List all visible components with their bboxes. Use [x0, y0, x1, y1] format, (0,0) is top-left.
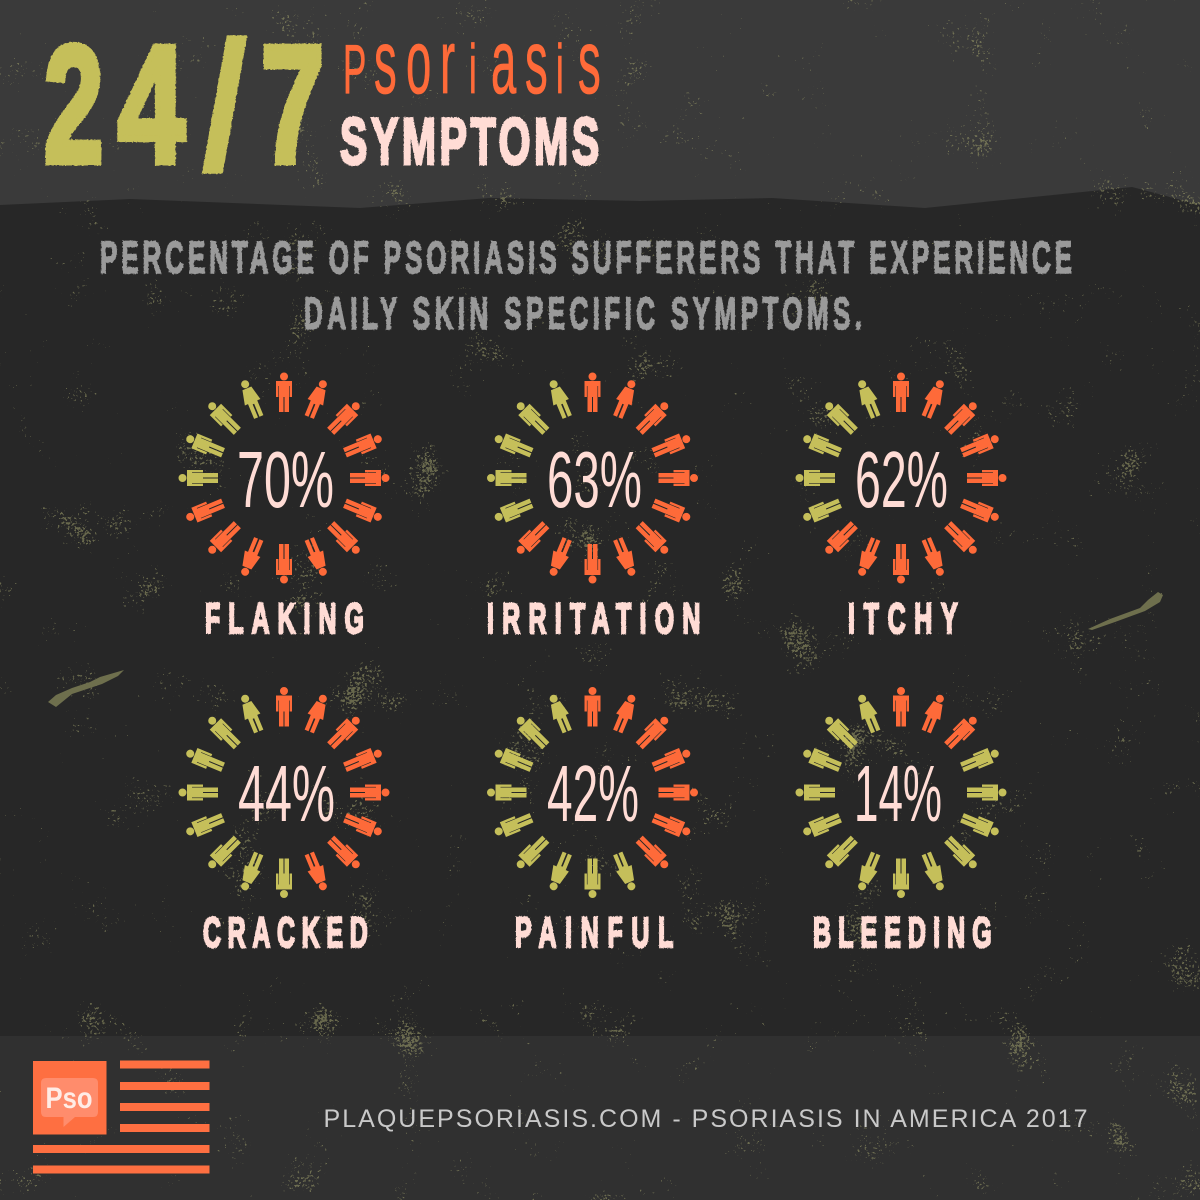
- title: 24/7: 7: [261, 12, 324, 198]
- label: CRACKED: [203, 909, 368, 957]
- label: BLEEDING: [813, 909, 992, 957]
- label: PAINFUL: [515, 909, 673, 957]
- person ring: [178, 687, 390, 898]
- title: 24/7: 2: [44, 11, 103, 198]
- flag canton: [33, 1061, 106, 1134]
- stat: painful 42%: [487, 687, 698, 957]
- title: Psoriasis: Psoriasis: [343, 12, 601, 113]
- person ring: [487, 687, 698, 898]
- percentage: 63%: [547, 435, 642, 524]
- stat: irritation 63%: [487, 372, 700, 643]
- percentage: 62%: [855, 435, 948, 524]
- title: SYMPTOMS: SYMPTOMS: [340, 104, 599, 178]
- stat: itchy 62%: [796, 372, 1006, 643]
- person ring: [796, 687, 1006, 898]
- intro text: DAILY SKIN SPECIFIC SYMPTOMS.: [304, 289, 862, 339]
- footer band: [0, 1036, 1200, 1200]
- person ring: [178, 372, 390, 584]
- logo: Pso flag: [33, 1060, 210, 1174]
- logo text: Pso: [46, 1082, 92, 1115]
- percentage: 70%: [237, 435, 334, 524]
- percentage: 14%: [854, 749, 942, 838]
- person ring: [487, 372, 698, 584]
- title: 24/7: /: [200, 3, 249, 210]
- header band: [0, 0, 1200, 208]
- label: FLAKING: [205, 595, 364, 643]
- title: 24/7: 4: [118, 11, 185, 198]
- stat: cracked 44%: [178, 687, 390, 957]
- footer source text: PLAQUEPSORIASIS.COM - PSORIASIS IN AMERICA 2017: [324, 1105, 1088, 1133]
- percentage: 42%: [547, 749, 639, 838]
- stat: bleeding 14%: [796, 687, 1006, 957]
- label: ITCHY: [848, 595, 958, 643]
- title: 24/7: [44, 3, 324, 210]
- person ring: [796, 372, 1006, 584]
- label: IRRITATION: [487, 595, 700, 643]
- speech bubble: [41, 1078, 98, 1127]
- intro text: [100, 233, 1072, 339]
- intro text: PERCENTAGE OF PSORIASIS SUFFERERS THAT EXPERIENCE: [100, 233, 1072, 283]
- stat: flaking 70%: [178, 372, 390, 643]
- streak mark right: [1088, 592, 1163, 630]
- streak mark left: [48, 670, 124, 707]
- flag stripes: [33, 1060, 210, 1174]
- percentage: 44%: [238, 749, 335, 838]
